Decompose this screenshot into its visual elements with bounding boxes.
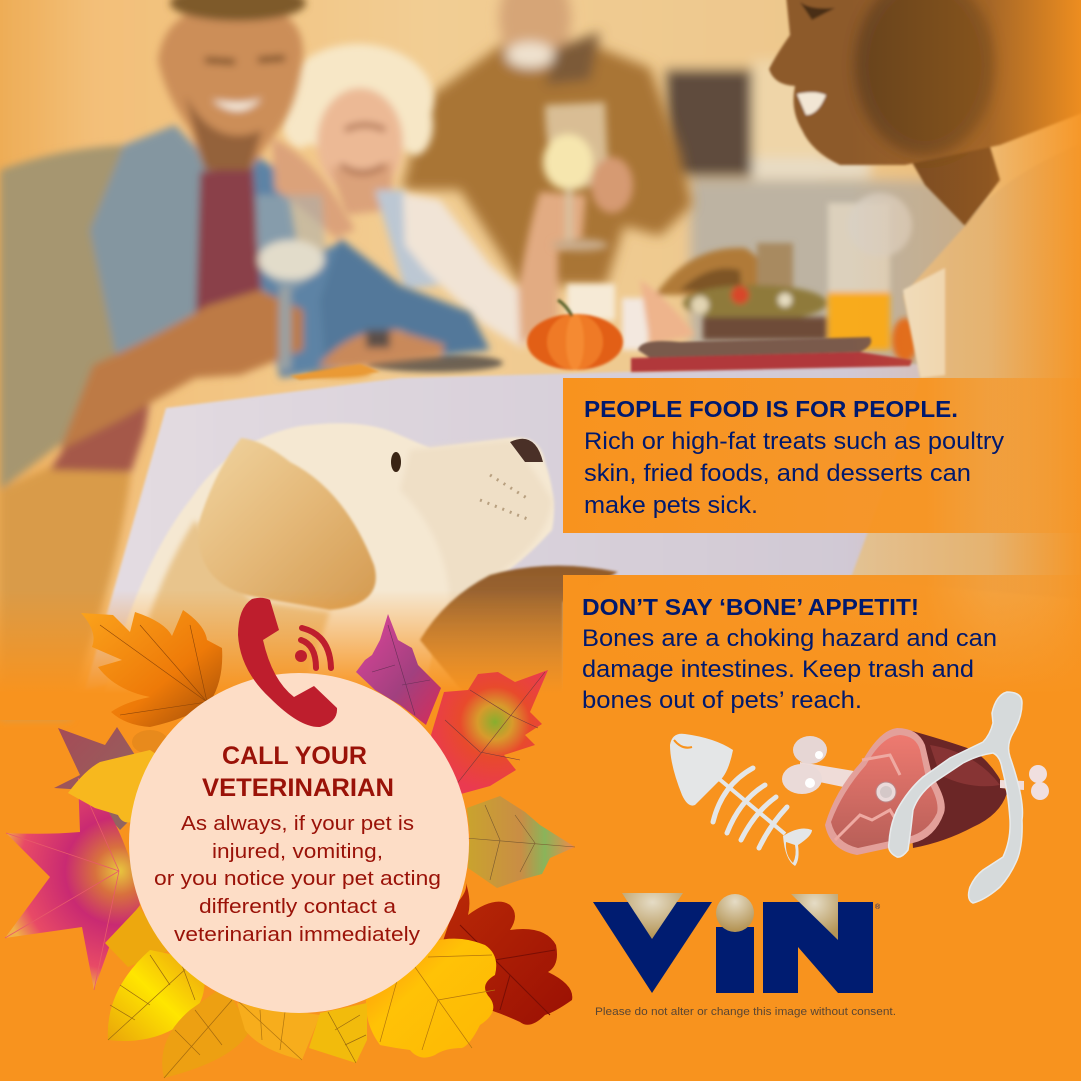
leaf: yellow lower left xyxy=(108,950,204,1041)
leaf cluster xyxy=(5,610,575,1078)
labrador dog xyxy=(100,423,554,710)
heading: people food: PEOPLE FOOD IS FOR PEOPLE. xyxy=(584,396,958,422)
logo: VIN xyxy=(593,893,881,993)
text: bone appetit body: damage intestines. Keep trash and xyxy=(582,656,974,683)
leaf: yellow small top left xyxy=(68,730,168,822)
text: call body: veterinarian immediately xyxy=(174,924,420,946)
wine glass and hand xyxy=(543,102,633,251)
heading: call your veterinarian: CALL YOUR xyxy=(222,742,367,770)
text: people food body: make pets sick. xyxy=(584,492,758,519)
red napkin and plate edge xyxy=(290,337,912,380)
leaf: dark red oak xyxy=(440,880,572,1025)
text: bone appetit body xyxy=(582,625,997,714)
leaf: yellow oak xyxy=(366,939,496,1058)
text: call body: or you notice your pet acting xyxy=(154,868,441,890)
table food and setting xyxy=(308,193,918,378)
leaf: olive orange xyxy=(465,796,575,888)
leaf: orange top xyxy=(81,610,222,727)
leaf: amber bottom xyxy=(237,1000,320,1060)
room background xyxy=(0,0,1081,700)
panel: bone appetit xyxy=(563,575,1081,720)
text: people food body: skin, fried foods, and desserts can xyxy=(584,460,971,487)
text: people food body xyxy=(584,428,1004,519)
text: people food body: Rich or high-fat treats such as poultry xyxy=(584,428,1004,455)
text: call body: differently contact a xyxy=(199,896,397,918)
text: call body xyxy=(154,813,441,946)
man in denim shirt xyxy=(0,0,490,720)
icon: wishbone xyxy=(889,692,1022,903)
pumpkin xyxy=(527,300,623,370)
leaf: yellow bottom xyxy=(309,1003,367,1063)
leaf: purple xyxy=(54,727,150,830)
leaf: pink star xyxy=(5,778,140,990)
young woman in cardigan xyxy=(769,0,1081,600)
panel: people food xyxy=(563,378,1081,533)
logo: VIN: ® xyxy=(875,903,881,911)
hand under dog's chin xyxy=(420,566,618,700)
leaf: red green xyxy=(431,670,548,794)
icon: phone xyxy=(238,598,337,727)
leaf: pink xyxy=(356,614,441,725)
older woman xyxy=(282,44,586,348)
heading: call your veterinarian: VETERINARIAN xyxy=(202,774,394,802)
photo: family at dinner table with dog xyxy=(0,0,1081,720)
heading: bone appetit: DON’T SAY ‘BONE’ APPETIT! xyxy=(582,594,919,620)
panel: call your veterinarian xyxy=(129,673,469,1013)
text: call body: As always, if your pet is xyxy=(181,813,414,835)
heading: call your veterinarian xyxy=(202,742,394,802)
orange edge fades xyxy=(0,0,1081,720)
leaf: amber lower xyxy=(162,985,250,1078)
table cloth xyxy=(85,364,920,690)
text: bone appetit body: bones out of pets’ reach. xyxy=(582,687,862,714)
old man standing xyxy=(402,0,692,285)
text: call body: injured, vomiting, xyxy=(212,841,383,863)
text: bone appetit body: Bones are a choking hazard and can xyxy=(582,625,997,652)
icon: ham with bone xyxy=(782,728,1049,855)
leaf: yellow hatched middle xyxy=(105,907,170,967)
icon: fish skeleton xyxy=(670,734,812,866)
text: consent notice: Please do not alter or change this image without consent. xyxy=(595,1006,896,1018)
